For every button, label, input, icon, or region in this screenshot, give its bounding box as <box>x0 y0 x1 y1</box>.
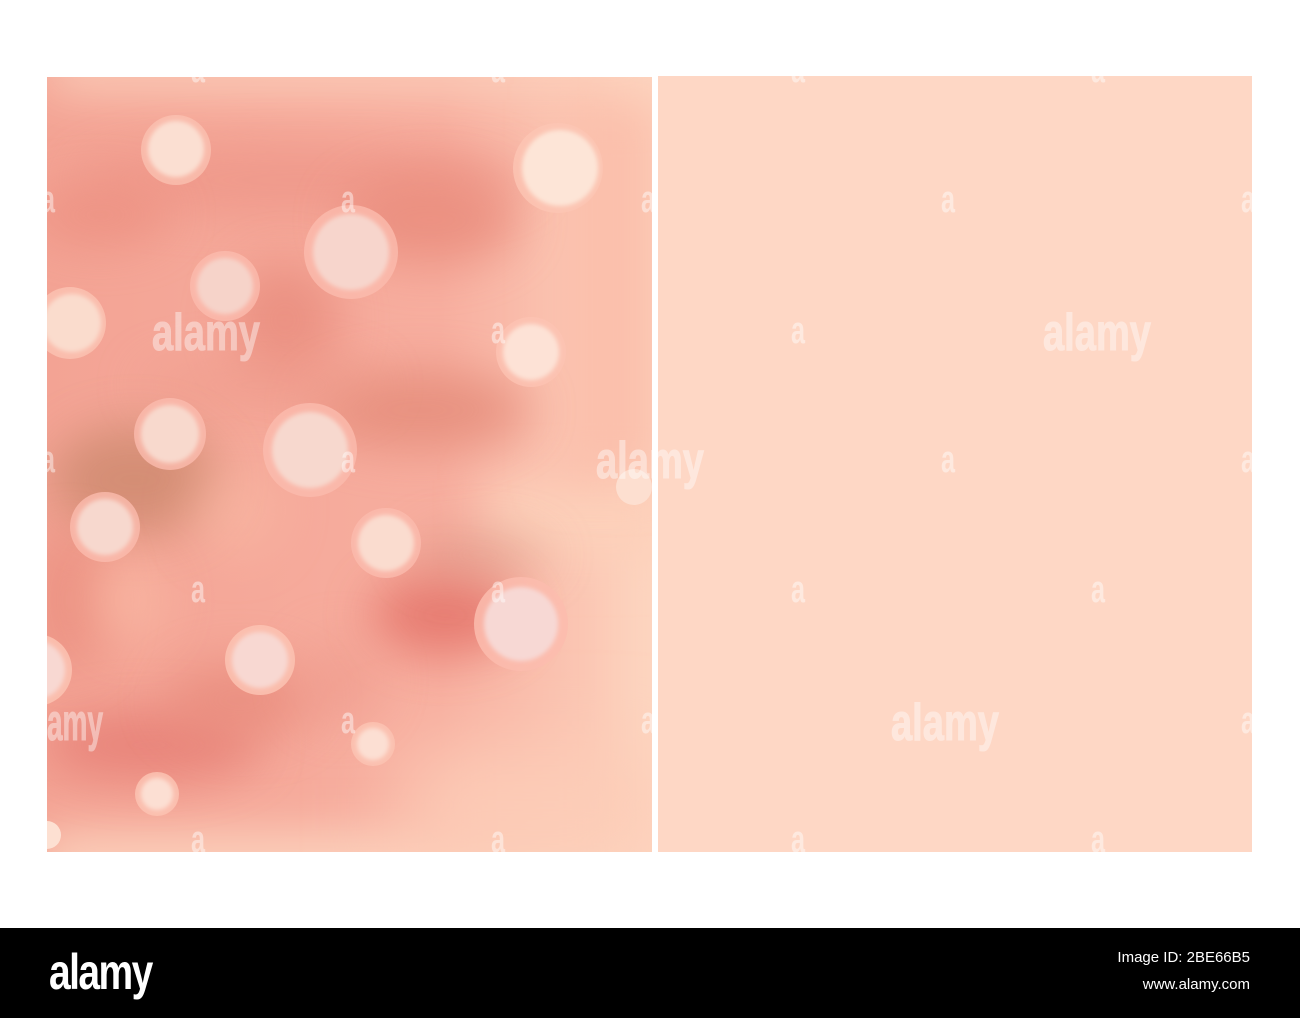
small watermark marks: a <box>1091 569 1106 611</box>
small watermark marks: a <box>491 569 506 611</box>
small watermark marks: a <box>1241 179 1256 221</box>
small watermark marks: a <box>1241 439 1256 481</box>
small watermark marks: a <box>1241 700 1256 742</box>
small watermark marks: a <box>191 819 206 861</box>
skin illustration panels <box>47 76 1252 852</box>
small watermark marks: a <box>491 310 506 352</box>
watermark text: alamy <box>152 304 260 362</box>
small watermark marks: a <box>941 439 956 481</box>
pustule 7 <box>134 398 206 470</box>
image id: Image ID: 2BE66B5 <box>1117 949 1250 966</box>
pustules <box>0 115 652 849</box>
small watermark marks: a <box>1091 819 1106 861</box>
footer band <box>0 928 1300 1018</box>
pustule 15 <box>351 722 395 766</box>
pustule 1 <box>141 115 211 185</box>
small watermark marks: a <box>491 49 506 91</box>
small watermark marks <box>41 49 1256 861</box>
small watermark marks: a <box>341 179 356 221</box>
small watermark marks: a <box>791 310 806 352</box>
small watermark marks: a <box>191 49 206 91</box>
pustule 8 <box>263 403 357 497</box>
small watermark marks: a <box>341 439 356 481</box>
pustule 2 <box>513 123 603 213</box>
footer logo: alamy <box>49 944 152 1000</box>
pustule 3 <box>304 205 398 299</box>
pustule 4 <box>190 251 260 321</box>
pustule 5 <box>47 287 106 359</box>
pustule 12 <box>474 577 560 670</box>
pustule 6 <box>496 321 562 387</box>
watermark text: alamy <box>596 432 704 490</box>
panel: clear skin <box>658 76 1252 852</box>
pustule 10 <box>351 508 421 578</box>
small watermark marks: a <box>341 700 356 742</box>
pustule 9 <box>70 492 140 562</box>
small watermark marks: a <box>1091 49 1106 91</box>
watermark text: alamy <box>891 694 999 752</box>
small watermark marks: a <box>791 569 806 611</box>
small watermark marks: a <box>41 439 56 481</box>
watermark text <box>47 304 1151 752</box>
watermark text: amy <box>47 694 103 752</box>
website: www.alamy.com <box>1143 976 1250 993</box>
small watermark marks: a <box>641 179 656 221</box>
panel: inflamed skin with pustules <box>47 77 652 852</box>
small watermark marks: a <box>41 179 56 221</box>
small watermark marks: a <box>491 819 506 861</box>
small watermark marks: a <box>791 819 806 861</box>
pustule 13 <box>225 625 295 695</box>
pustule 14 <box>47 636 72 704</box>
pustule 11 <box>616 469 652 505</box>
small watermark marks: a <box>641 700 656 742</box>
small watermark marks: a <box>791 49 806 91</box>
pustule 16 <box>135 772 179 816</box>
pustule 17 <box>47 821 61 849</box>
watermark text: alamy <box>1043 304 1151 362</box>
small watermark marks: a <box>941 179 956 221</box>
small watermark marks: a <box>191 569 206 611</box>
redness blotches <box>47 77 652 852</box>
